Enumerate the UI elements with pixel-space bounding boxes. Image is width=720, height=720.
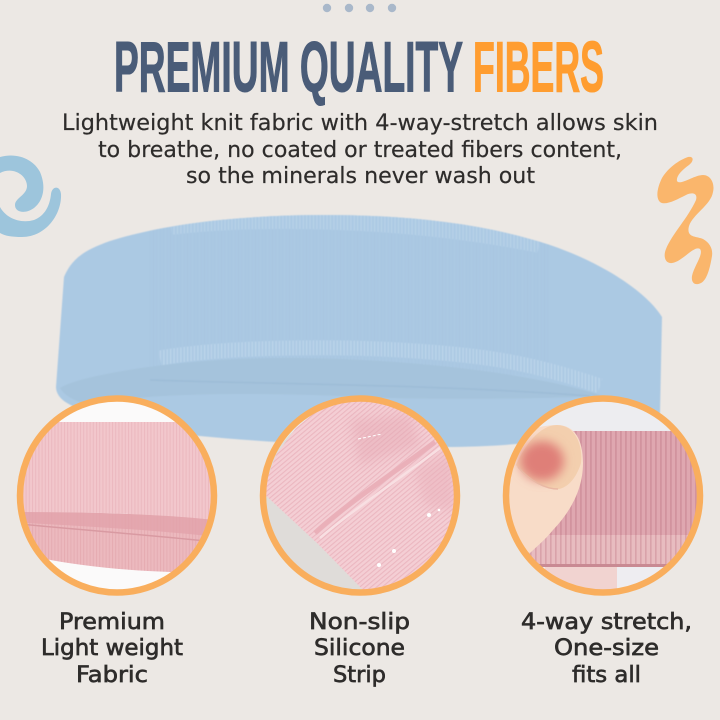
label: premium light weight fabric — [41, 610, 183, 688]
lower folded pink — [25, 512, 208, 572]
band outer surface — [56, 215, 662, 447]
label: non-slip silicone strip: Non-slip — [309, 610, 410, 635]
label: premium light weight fabric: Premium — [59, 610, 165, 635]
vertical rib texture — [150, 215, 600, 386]
label: non-slip silicone strip — [309, 610, 410, 688]
ring — [20, 398, 214, 592]
shaded patches — [350, 415, 420, 465]
seam — [315, 442, 435, 533]
label: premium light weight fabric: Fabric — [76, 663, 148, 688]
label: 4-way stretch one-size — [521, 610, 692, 688]
ring — [506, 398, 700, 592]
label: premium light weight fabric: Light weight — [41, 636, 183, 661]
label: 4-way stretch one-size: 4-way stretch, — [521, 610, 692, 635]
circle: silicone strip close-up — [260, 395, 465, 595]
ring — [263, 398, 457, 592]
gloss spots — [358, 434, 440, 567]
carousel dots — [323, 4, 396, 12]
icon: blue swirl — [0, 155, 61, 237]
label: 4-way stretch one-size: fits all — [572, 663, 641, 688]
subtitle text: to breathe, no coated or treated fibers content, — [98, 138, 622, 163]
label: non-slip silicone strip: Strip — [333, 663, 386, 688]
subtitle text: Lightweight knit fabric with 4-way-stretch allows skin — [62, 111, 658, 136]
upper ribbed pink — [23, 422, 211, 520]
icon: orange squiggle — [657, 157, 714, 284]
inner surface — [60, 358, 603, 406]
subtitle text: so the minerals never wash out — [186, 164, 535, 189]
subtitle text — [62, 111, 658, 189]
circle: stretch close-up with finger — [500, 395, 710, 598]
label: 4-way stretch one-size: One-size — [554, 636, 659, 661]
headband photo — [56, 215, 662, 447]
label: non-slip silicone strip: Silicone — [314, 636, 405, 661]
nail — [516, 425, 581, 489]
finger — [509, 425, 583, 553]
diagonal ribbed pink — [266, 402, 454, 590]
ribbed band — [548, 431, 697, 535]
circle: fabric close-up — [10, 395, 225, 595]
